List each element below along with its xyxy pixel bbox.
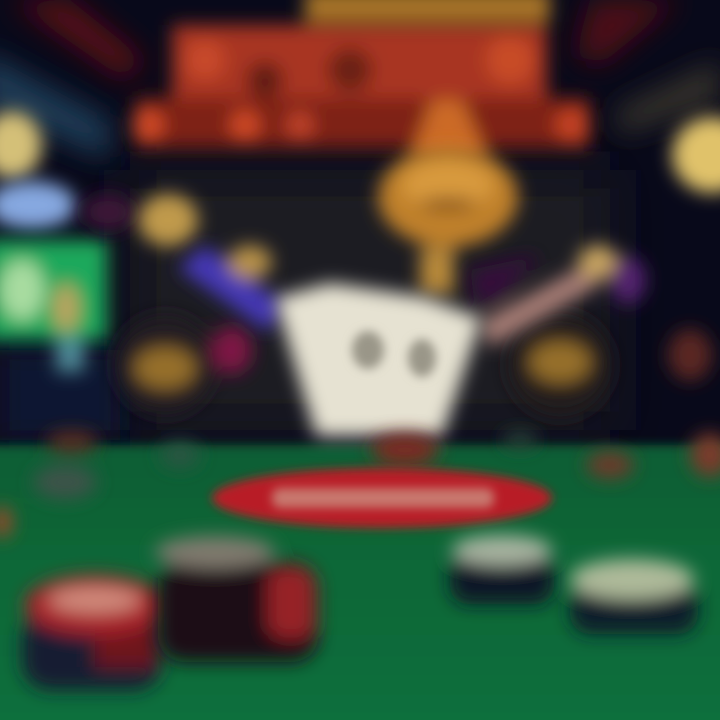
poker chips right bbox=[450, 535, 698, 634]
neon sign: red marquee bbox=[132, 0, 590, 160]
figure body: white card shirt bbox=[275, 283, 482, 466]
chip stack: red front bbox=[22, 575, 165, 690]
chip stack: navy centre bbox=[450, 535, 554, 604]
chip stack: navy right bbox=[570, 559, 698, 634]
red oval banner bbox=[212, 468, 552, 528]
right lamp bbox=[672, 117, 720, 193]
table chips in the distance bbox=[0, 431, 720, 538]
felt table bbox=[0, 445, 720, 720]
icon: yellow lamp left bbox=[0, 111, 42, 179]
icon: yellow lamp bbox=[138, 194, 198, 246]
red tie base bbox=[371, 434, 439, 466]
slot wheel right bbox=[508, 313, 712, 417]
slot wheel left bbox=[115, 315, 252, 415]
icon: blue light left bbox=[0, 181, 76, 229]
screen: green slot display bbox=[0, 240, 107, 372]
figure arms bbox=[178, 245, 646, 347]
poker chips left bbox=[22, 536, 318, 690]
icon: purple glow bbox=[82, 194, 134, 230]
left lights and screens bbox=[0, 111, 198, 372]
figure head: golden face bbox=[378, 147, 518, 294]
chip stack: dark rear bbox=[155, 536, 318, 662]
icon: card pips bbox=[352, 331, 436, 377]
